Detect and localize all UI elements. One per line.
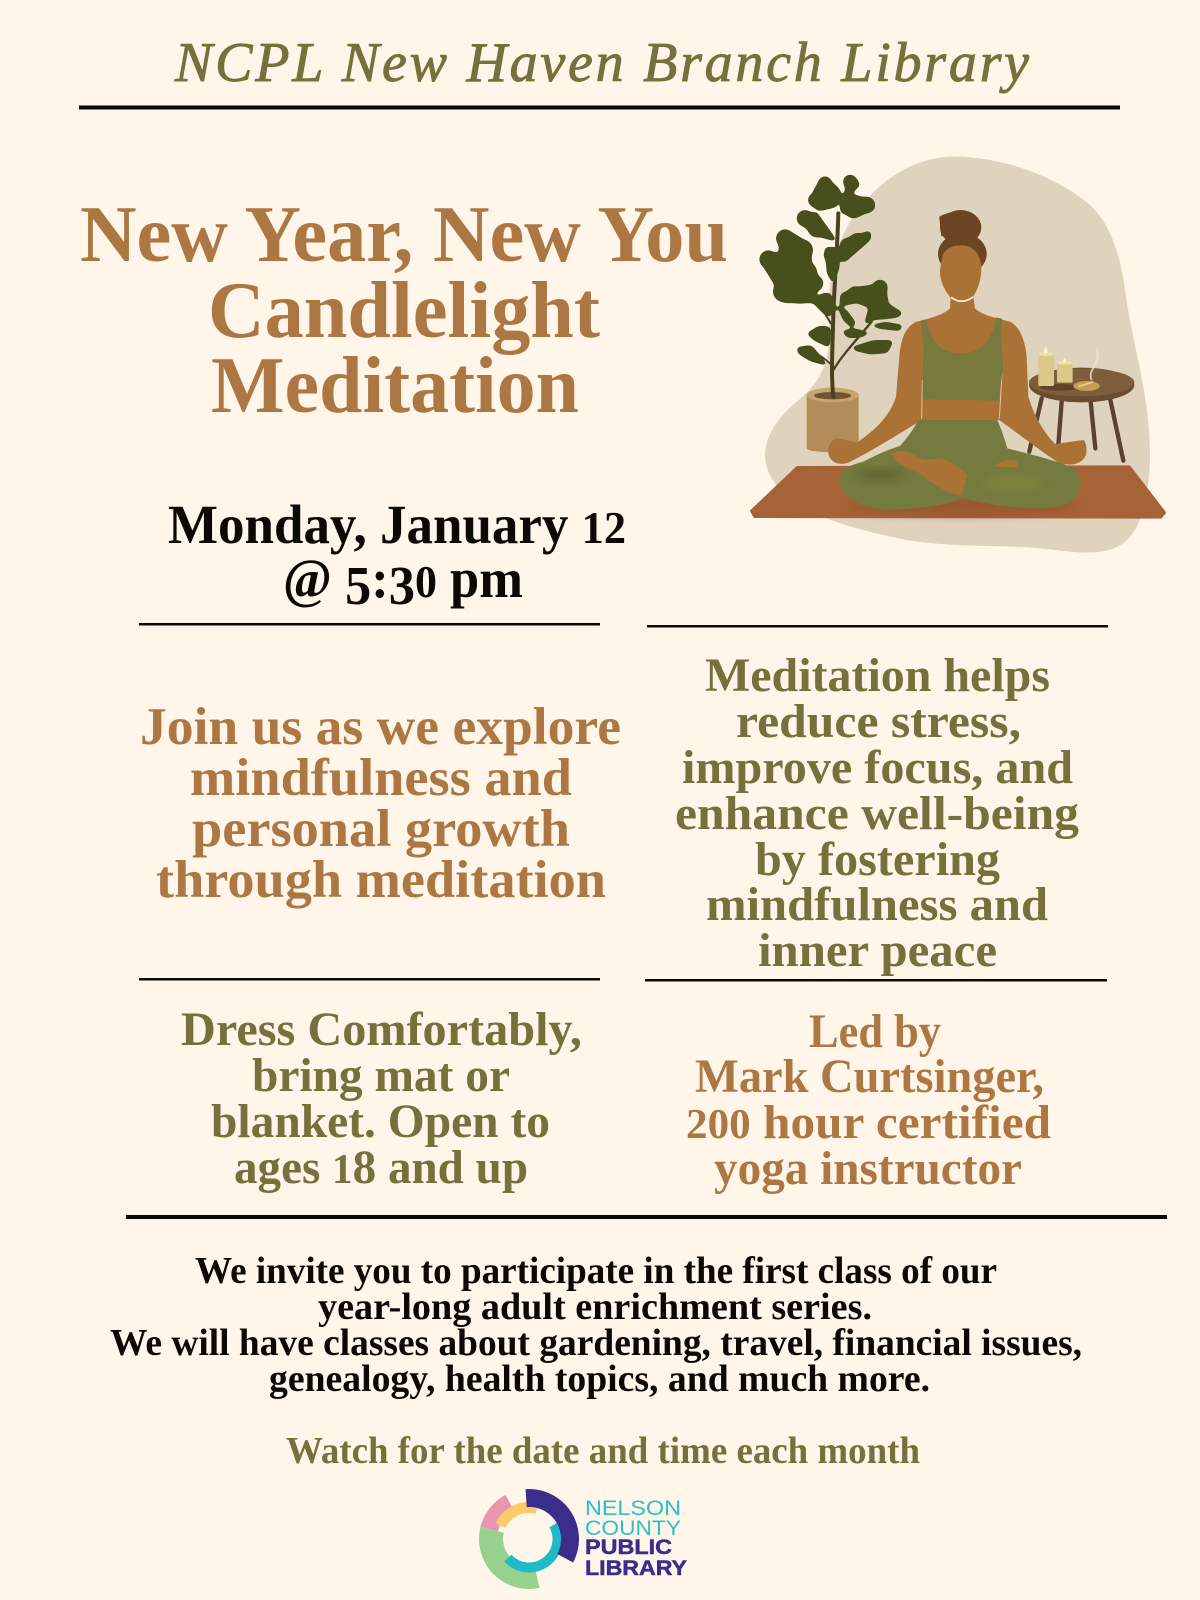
text block: series invitation: genealogy, health topics, and much more. (269, 1358, 930, 1400)
icon: side table with candles (1029, 347, 1134, 461)
text block: instructor: yoga instructor (714, 1142, 1022, 1195)
illustration: woman meditating with plant and candles (751, 157, 1165, 553)
date and time: Monday, January 12 (168, 494, 626, 555)
crop top (921, 317, 1003, 401)
date and time: @ (283, 548, 334, 609)
text block: invitation: personal growth (192, 800, 570, 858)
title (80, 191, 728, 430)
text block: series invitation (110, 1250, 1082, 1400)
text block: what to bring: bring mat or (252, 1049, 510, 1102)
text block: what to bring (181, 1003, 582, 1194)
text block: invitation (140, 698, 621, 909)
logo mark: ring segments (479, 1489, 579, 1589)
logo: Nelson County Public Library: PUBLIC (585, 1536, 672, 1559)
hair (938, 210, 987, 275)
text block: benefits of meditation: by fostering (755, 833, 1000, 886)
icon: potted fiddle-leaf plant (760, 175, 903, 452)
crossed feet (892, 451, 967, 495)
logo: Nelson County Public Library (479, 1489, 687, 1589)
leggings (838, 420, 1080, 510)
logo: Nelson County Public Library: LIBRARY (585, 1557, 687, 1580)
text: watch for dates: Watch for the date and time each month (286, 1430, 920, 1472)
text block: invitation: Join us as we explore (140, 698, 621, 756)
text block: benefits of meditation: improve focus, and (682, 741, 1073, 794)
title: New Year, New You (80, 191, 728, 279)
text block: series invitation: We invite you to participate in the first class of our (195, 1250, 997, 1292)
text block: invitation: through meditation (156, 851, 606, 909)
text block: benefits of meditation: reduce stress, (736, 695, 1021, 748)
logo: Nelson County Public Library: COUNTY (585, 1517, 681, 1540)
header: library name: NCPL New Haven Branch Library (174, 32, 1029, 94)
text block: benefits of meditation: Meditation helps (705, 649, 1050, 702)
text block: instructor: Led by (809, 1005, 941, 1058)
torso and arms (828, 297, 1087, 465)
text block: instructor (686, 1005, 1051, 1195)
date and time (168, 494, 626, 616)
text block: series invitation: We will have classes about gardening, travel, financial issues, (110, 1322, 1082, 1364)
text block: what to bring: blanket. Open to (211, 1095, 550, 1148)
date and time: pm (451, 548, 527, 609)
text block: instructor: Mark Curtsinger, (695, 1050, 1044, 1103)
date and time: : (371, 548, 389, 609)
date and time: 3 (389, 555, 415, 616)
text block: what to bring: ages 18 and up (234, 1141, 528, 1194)
text block: what to bring: Dress Comfortably, (181, 1003, 582, 1056)
logo: Nelson County Public Library: NELSON (585, 1497, 681, 1520)
text block: instructor: 200 hour certified (686, 1096, 1051, 1149)
date and time: 5 (345, 555, 371, 616)
text block: benefits of meditation: mindfulness and (706, 878, 1048, 931)
meditating figure (828, 210, 1087, 510)
text block: benefits of meditation (675, 649, 1079, 977)
background blob (765, 157, 1150, 553)
text block: invitation: mindfulness and (190, 749, 572, 807)
title: Candlelight (208, 267, 600, 355)
text block: series invitation: year-long adult enrichment series. (318, 1286, 872, 1328)
text block: benefits of meditation: enhance well-being (675, 787, 1079, 840)
title: Meditation (211, 342, 579, 430)
date and time: 0 (415, 556, 437, 607)
face (940, 245, 981, 303)
text block: benefits of meditation: inner peace (758, 924, 997, 977)
yoga mat (751, 467, 1165, 517)
